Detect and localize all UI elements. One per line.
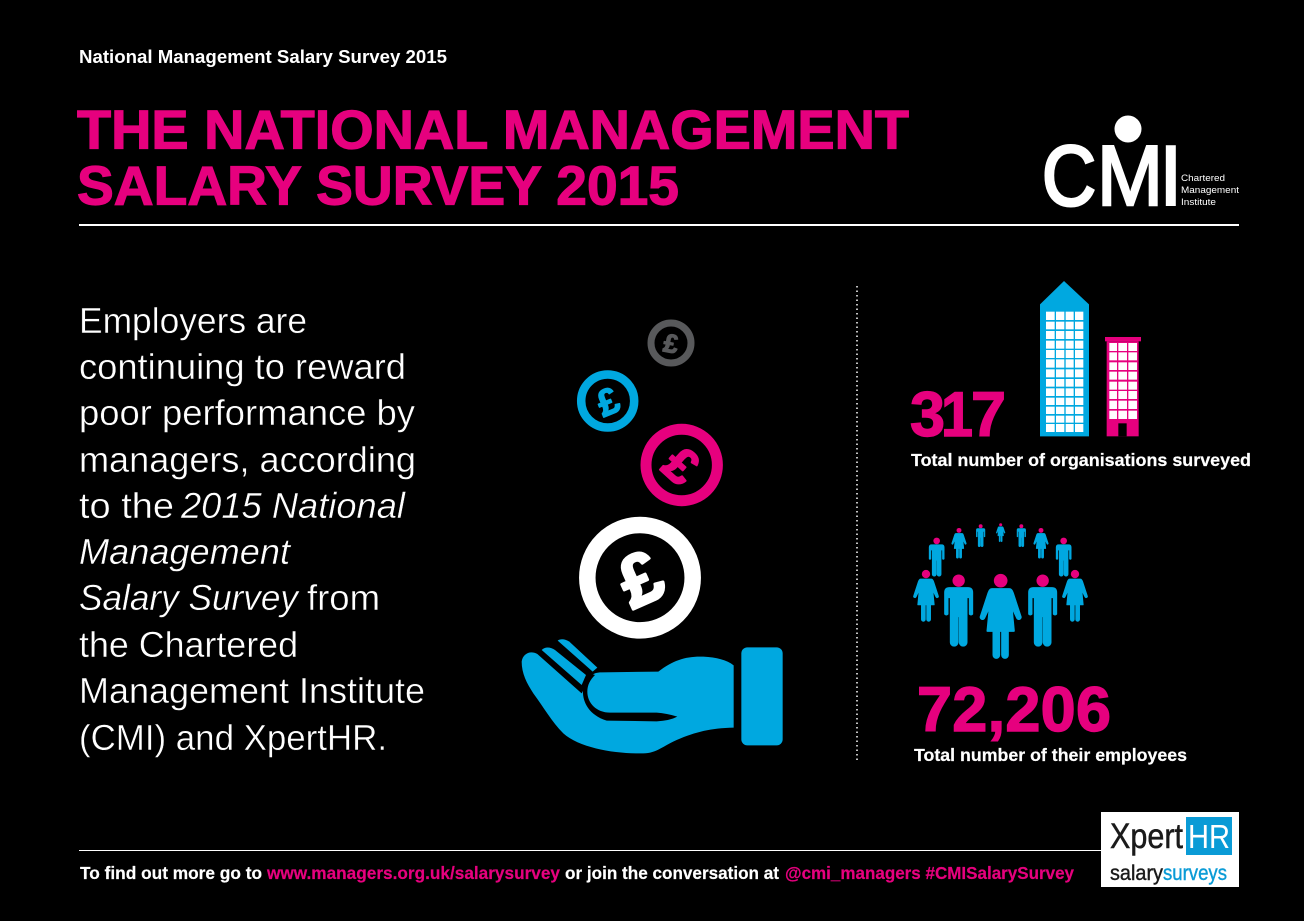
icon: grey coin: £	[661, 327, 681, 360]
stat: 72,206 employees	[914, 675, 1187, 765]
logo: CMI	[1042, 116, 1239, 224]
intro text block: Management Institute	[79, 670, 425, 711]
icon: pink coin	[646, 429, 717, 501]
logo: XpertHR salary surveys: HR	[1188, 818, 1230, 855]
intro text block: the Chartered	[79, 624, 298, 665]
intro text block: continuing to reward	[79, 346, 406, 387]
eyebrow heading: National Management Salary Survey 2015	[79, 47, 447, 67]
logo: XpertHR salary surveys: surveys	[1163, 862, 1227, 885]
footer call to action: www.managers.org.uk/salarysurvey	[266, 863, 560, 883]
icon: white coin	[587, 525, 693, 630]
stat: 317 organisations	[910, 380, 1251, 470]
logo: CMI: Institute	[1181, 197, 1216, 208]
icon: blue coin: £	[591, 379, 626, 425]
stat: 317 organisations: 3	[910, 380, 945, 450]
footer call to action: To find out more go to	[80, 863, 262, 883]
logo: CMI: Chartered	[1181, 173, 1225, 184]
footer call to action: or join the conversation at	[565, 863, 779, 883]
icon: buildings	[1040, 281, 1141, 436]
icon: coins falling into hand	[522, 323, 783, 753]
icon: crowd of people	[914, 523, 1087, 658]
footer call to action	[80, 863, 1074, 883]
intro text block: to the	[79, 485, 174, 526]
intro text block: Management	[79, 531, 292, 572]
stat: 317 organisations: 1	[941, 380, 973, 450]
logo: XpertHR salary surveys: Xpert	[1110, 817, 1183, 856]
intro text block: managers, according	[79, 439, 416, 480]
icon: grey coin	[651, 323, 691, 363]
intro text block: 2015 National	[180, 485, 406, 526]
logo: CMI: C	[1042, 129, 1096, 224]
intro text block: from	[307, 577, 380, 618]
icon: blue coin	[581, 374, 634, 428]
title: SALARY SURVEY 2015	[77, 154, 679, 216]
icon: white coin: £	[606, 535, 675, 624]
logo: CMI: Management	[1181, 185, 1239, 196]
stat: 317 organisations: 7	[971, 380, 1006, 450]
stat: 72,206 employees: 72,206	[917, 675, 1111, 745]
icon: tall blue building	[1040, 281, 1089, 436]
intro text block: (CMI) and XpertHR.	[79, 717, 387, 758]
stat: 317 organisations: Total number of organisations surveyed	[911, 450, 1251, 470]
logo: XpertHR salary surveys	[1101, 812, 1239, 887]
stat: 72,206 employees: Total number of their employees	[914, 745, 1187, 765]
logo: CMI: I	[1159, 129, 1183, 224]
logo: CMI: M	[1097, 129, 1163, 224]
icon: pink coin: £	[652, 436, 710, 496]
intro text block	[79, 300, 425, 758]
icon: hand	[522, 639, 783, 753]
icon: short pink building	[1105, 337, 1141, 436]
intro text block: Salary Survey	[79, 577, 300, 618]
footer call to action: @cmi_managers #CMISalarySurvey	[785, 863, 1074, 883]
logo: XpertHR salary surveys: salary	[1110, 862, 1163, 885]
intro text block: poor performance by	[79, 392, 415, 433]
title: THE NATIONAL MANAGEMENT	[77, 98, 909, 160]
intro text block: Employers are	[79, 300, 307, 341]
title	[77, 98, 909, 216]
